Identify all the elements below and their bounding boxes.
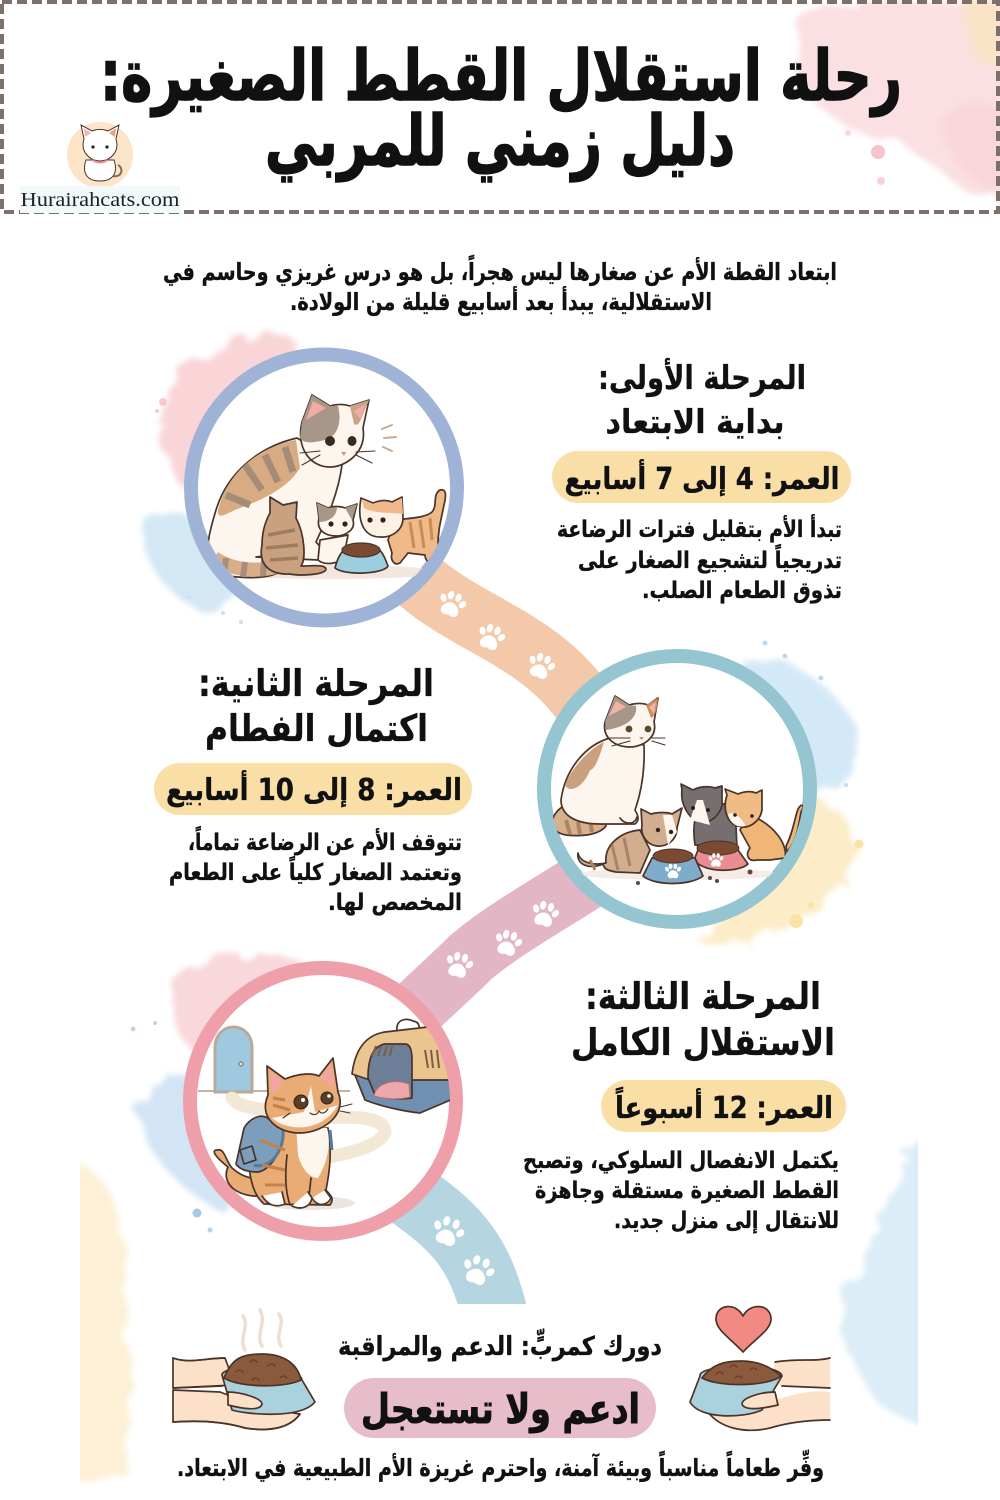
watercolor: stage 2 xyxy=(700,640,864,945)
watercolor: header pink wash xyxy=(795,0,1000,200)
description: stage 2: تتوقف الأم عن الرضاعة تماماً، xyxy=(188,826,462,856)
age pill: stage 2 xyxy=(154,763,472,815)
kitten body xyxy=(249,1128,332,1205)
mother cat and kittens with bowl xyxy=(208,395,445,579)
paw prints: pink ribbon xyxy=(442,898,562,980)
description: stage 2: وتعتمد الصغار كلياً على الطعام xyxy=(169,856,462,886)
description: stage 3: يكتمل الانفصال السلوكي، وتصبح xyxy=(523,1148,839,1174)
stage 2 text xyxy=(154,662,472,916)
heading: stage 3 xyxy=(571,975,835,1064)
dashed frame xyxy=(2,2,998,212)
footer note: وفِّر طعاماً مناسباً وبيئة آمنة، واحترم غريزة الأم الطبيعية في الابتعاد. xyxy=(177,1449,824,1482)
food bowl xyxy=(335,546,388,573)
description: stage 1 xyxy=(557,513,842,604)
circle frame: stage 2 xyxy=(544,656,810,922)
stage 1 illustration xyxy=(191,354,457,620)
kitten with backpack, door and carrier xyxy=(198,1019,455,1210)
heading: stage 2: اكتمال الفطام xyxy=(205,707,428,751)
description: stage 1: تذوق الطعام الصلب. xyxy=(642,578,842,604)
mother cat with kittens at two bowls xyxy=(552,696,803,885)
stage 3 text xyxy=(523,975,846,1234)
orange kitten xyxy=(388,490,445,564)
intro text xyxy=(163,255,837,316)
logo: Hurairah cats: Hurairahcats.com xyxy=(20,189,180,211)
path: blue ribbon xyxy=(410,1195,540,1324)
intro text: ابتعاد القطة الأم عن صغارها ليس هجراً، بل هو درس غريزي وحاسم في xyxy=(163,255,837,286)
heading: stage 1: بداية الابتعاد xyxy=(606,402,784,441)
tabby kitten xyxy=(261,497,326,575)
heading: stage 3: المرحلة الثالثة: xyxy=(585,975,821,1018)
description: stage 3 xyxy=(523,1148,839,1234)
mother head xyxy=(301,395,369,467)
description: stage 1: تدريجياً لتشجيع الصغار على xyxy=(578,544,842,574)
watercolor: lower page corners xyxy=(70,1130,930,1480)
icon: hands holding food bowl with heart xyxy=(690,1307,830,1430)
kitten head xyxy=(265,1058,340,1133)
title xyxy=(100,35,902,182)
description: stage 3: للانتقال إلى منزل جديد. xyxy=(614,1208,839,1234)
description: stage 2 xyxy=(169,826,462,916)
title: دليل زمني للمربي xyxy=(265,100,735,182)
age pill: stage 1: العمر: 4 إلى 7 أسابيع xyxy=(564,459,840,497)
icon: heart xyxy=(716,1307,771,1352)
age pill: stage 2: العمر: 8 إلى 10 أسابيع xyxy=(166,770,462,808)
watercolor: stage 3 xyxy=(130,953,310,1232)
age pill: stage 3 xyxy=(601,1080,846,1132)
logo: Hurairah cats xyxy=(20,122,180,213)
stage 2 illustration xyxy=(544,656,810,922)
description: stage 2: المخصص لها. xyxy=(328,890,462,916)
heading: stage 3: الاستقلال الكامل xyxy=(571,1021,835,1064)
heading: stage 1 xyxy=(598,357,806,441)
path: peach ribbon xyxy=(420,582,585,705)
icon: hands holding food bowl with steam xyxy=(173,1310,315,1429)
paw prints: peach ribbon xyxy=(434,587,559,682)
heading: stage 2: المرحلة الثانية: xyxy=(198,662,434,705)
calico kitten xyxy=(318,535,348,563)
paw prints: blue ribbon xyxy=(427,1212,499,1289)
backpack xyxy=(236,1116,283,1172)
heading: stage 1: المرحلة الأولى: xyxy=(598,357,806,398)
callout pill: ادعم ولا تستعجل xyxy=(361,1385,640,1434)
circle frame: stage 3 xyxy=(190,968,456,1234)
bottom subheading: دورك كمربٍّ: الدعم والمراقبة xyxy=(338,1329,662,1362)
intro text: الاستقلالية، يبدأ بعد أسابيع قليلة من الولادة. xyxy=(290,286,712,316)
circle frame: stage 1 xyxy=(191,354,457,620)
age pill: stage 1 xyxy=(552,451,851,503)
carrier xyxy=(397,1019,419,1032)
description: stage 1: تبدأ الأم بتقليل فترات الرضاعة xyxy=(557,513,842,543)
description: stage 3: القطط الصغيرة مستقلة وجاهزة xyxy=(535,1178,839,1204)
watercolor: stage 1 xyxy=(144,335,295,624)
callout pill xyxy=(344,1378,656,1438)
heading: stage 2 xyxy=(198,662,434,751)
path: pink ribbon xyxy=(405,878,590,1020)
kitten tail xyxy=(214,1150,262,1196)
header banner xyxy=(0,0,1000,214)
stage 3 illustration xyxy=(190,968,456,1234)
stage 1 text xyxy=(552,357,851,604)
age pill: stage 3: العمر: 12 أسبوعاً xyxy=(615,1086,833,1126)
